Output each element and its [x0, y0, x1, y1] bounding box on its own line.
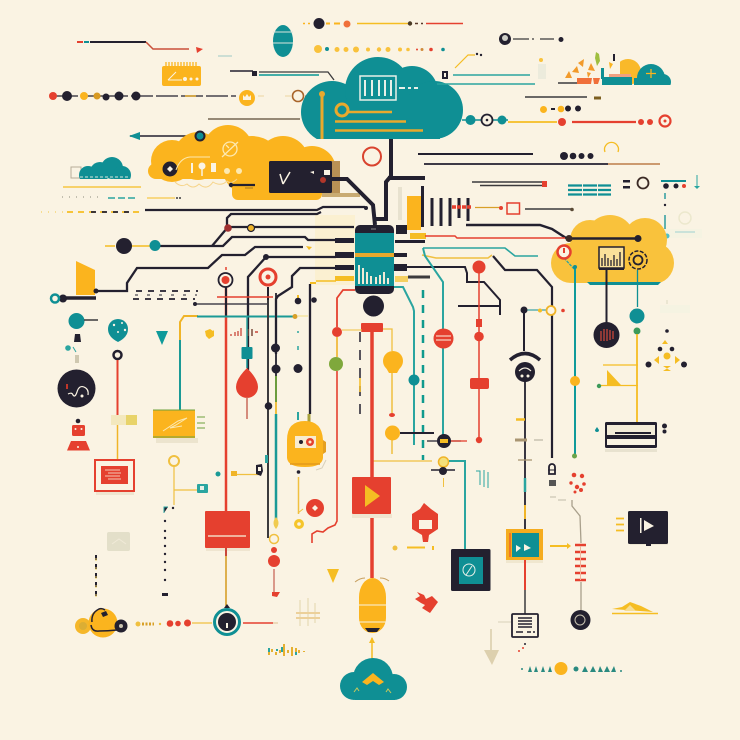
bottom-left teal node and lollipop: [65, 313, 98, 363]
teal triangle: [156, 331, 168, 345]
dark data panel: [595, 422, 667, 452]
teal play panel: [506, 529, 543, 615]
stacked nodes under teal line: [268, 517, 280, 597]
icon: small top-right cloud scene: [558, 52, 671, 85]
small bar icons: [205, 328, 258, 339]
red ladder resistor: [550, 543, 586, 580]
panel: yellow cloud: [148, 125, 336, 200]
icon: small teal cloud: [70, 157, 131, 179]
yellow-teal feed line: [180, 314, 308, 412]
top-right key icon and dashes: [499, 33, 564, 45]
main red line and play button: [352, 332, 392, 578]
mid-right line and dots: [525, 96, 601, 113]
yellow robot head: [287, 414, 326, 470]
bar column block: [398, 186, 574, 230]
red ring: [363, 148, 381, 166]
small nodes beside chip: [295, 276, 355, 327]
target nodes: [193, 267, 276, 511]
icon: teal helmet: [273, 25, 293, 57]
teal bus lines right of cloud: [437, 53, 546, 84]
dark vertical with teal segment: [265, 293, 302, 538]
dashed dark grid: [133, 291, 198, 299]
panel: central phone chip: [335, 225, 430, 316]
left dashed rows: [41, 187, 182, 212]
grey envelope tile: [107, 532, 130, 551]
yellow triangle diagram: [597, 365, 638, 388]
beige down arrow: [484, 629, 499, 665]
yellow ring below robot: [294, 470, 324, 529]
faint beige cluster: [296, 598, 320, 626]
dark teal dial box: [451, 549, 490, 591]
small coloured bits: [269, 644, 304, 656]
small teal bracket glyph: [476, 470, 488, 488]
red line with nodes: [470, 260, 489, 443]
icon: yellow chip box: [162, 62, 201, 86]
teal text block: [568, 186, 611, 194]
red drop with teal tag: [236, 316, 258, 419]
yellow gear ball cluster: [75, 555, 128, 638]
top dotted row two: [314, 45, 445, 53]
panel: teal arrow: [129, 132, 196, 140]
icon: red robot beacon: [67, 419, 90, 450]
faint right tag: [660, 300, 690, 313]
small dark-teal tag trio: [216, 455, 268, 476]
dotted vertical: [162, 507, 174, 596]
upper connector lines: [218, 56, 334, 80]
dotted yellow row: [136, 620, 212, 627]
bottom teal cloud: [340, 658, 407, 700]
right vertical lines from cloud: [570, 265, 644, 455]
icon: teal speckled blob: [108, 319, 128, 342]
yellow flight panel: [153, 410, 205, 443]
wifi icon and line: [510, 354, 543, 530]
panel: yellow right cloud: [551, 215, 674, 290]
cluster bottom of right lines: [548, 454, 586, 612]
thick cables to top cloud: [375, 139, 425, 219]
bottom teal marker row: [521, 662, 622, 675]
video player panel: [616, 511, 668, 546]
yellow mountain shoe: [612, 602, 658, 614]
yellow dash connector: [392, 546, 434, 550]
top dotted row one: [303, 18, 463, 29]
dark chart circle: [594, 322, 620, 348]
panel: top teal cloud: [301, 57, 463, 143]
dark device box with cord: [229, 161, 375, 225]
left red line with framed box: [95, 351, 137, 495]
left node row: [49, 90, 311, 106]
red cross glyph: [415, 592, 438, 613]
red ring node on cloud: [558, 246, 570, 258]
yellow up arrow: [369, 637, 375, 659]
icon: dark gauge circle: [58, 370, 96, 408]
red striped ball: [434, 328, 454, 348]
circuit traces left of chip: [96, 207, 365, 414]
yellow bulb: [361, 323, 434, 454]
top-left connector line: [77, 42, 203, 53]
right circuit traces: [394, 225, 575, 460]
dark junction nodes: [372, 374, 467, 550]
yellow capsule: [355, 578, 389, 633]
pale glow behind circuit: [315, 215, 355, 285]
small ring chain: [520, 306, 565, 351]
icon: yellow flag block: [51, 261, 98, 302]
yellow ring branch: [169, 456, 208, 505]
long right lines: [418, 142, 660, 187]
triangular node cluster: [646, 329, 687, 371]
dark dial circle: [570, 610, 590, 630]
red trace with green node: [312, 327, 362, 543]
short line under node row: [208, 118, 300, 120]
nodes right of top cloud: [462, 114, 670, 126]
yellow triangle: [327, 569, 339, 583]
document box: [498, 614, 538, 652]
right top legend icons: [623, 175, 702, 238]
teal ring lock node: [214, 604, 278, 634]
node trio on left trace: [105, 206, 368, 260]
red octagon icon: [412, 503, 438, 542]
red panel box: [205, 511, 250, 606]
